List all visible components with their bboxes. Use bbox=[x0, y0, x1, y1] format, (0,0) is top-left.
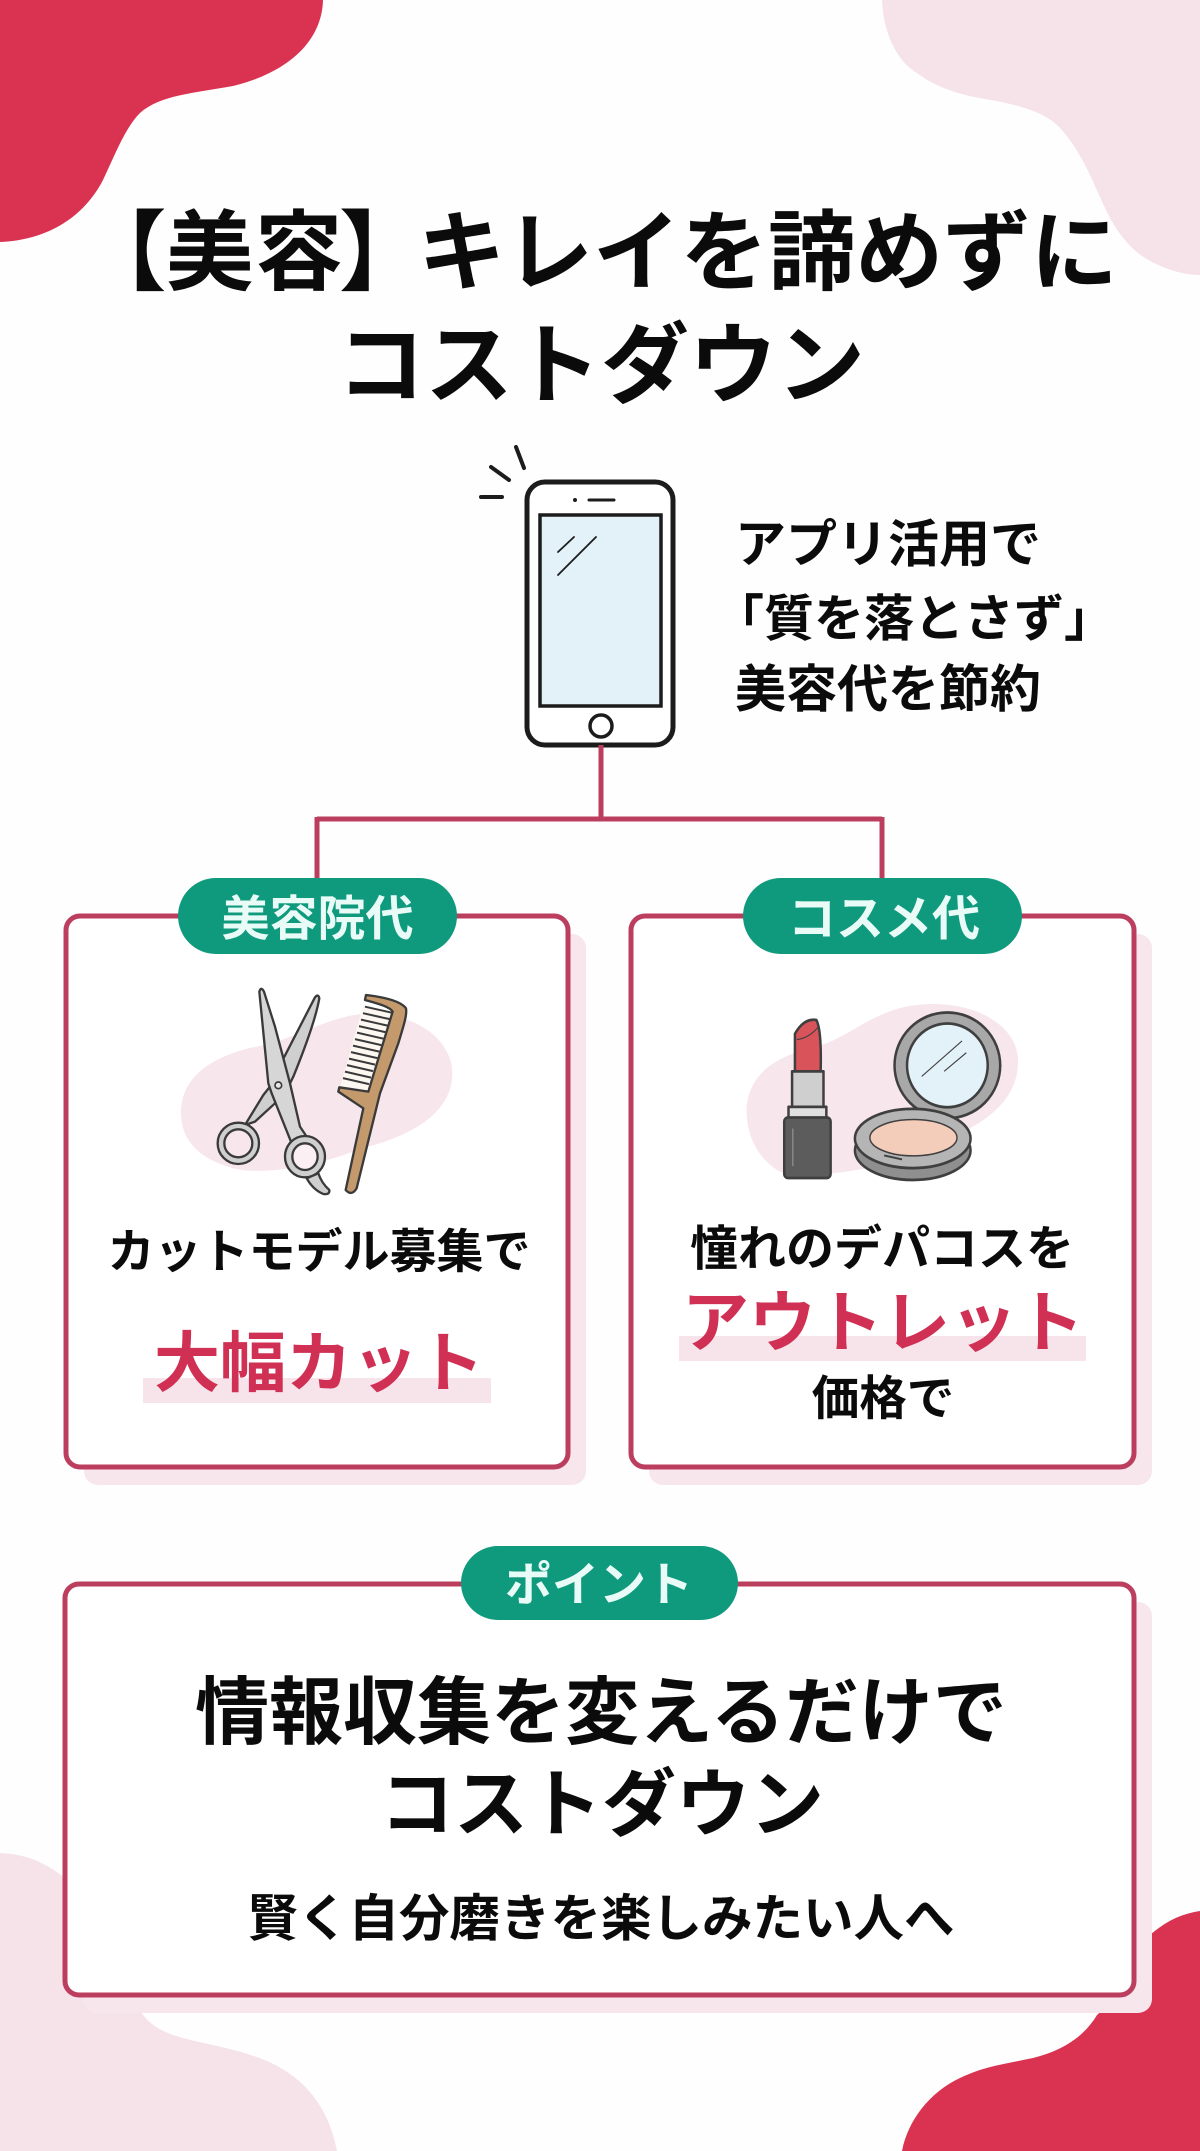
card frame bbox=[631, 916, 1134, 1467]
card text: salon: 大幅カット bbox=[154, 1326, 484, 1400]
title: コストダウン bbox=[337, 316, 865, 415]
icon: scissors and comb bbox=[181, 989, 452, 1194]
blob: top left crimson bbox=[0, 0, 323, 242]
pill: cosmetics: コスメ代 bbox=[788, 893, 980, 946]
tree connector bbox=[317, 745, 882, 885]
panel: cosmetics card bbox=[631, 878, 1152, 1485]
point heading: コストダウン bbox=[380, 1763, 824, 1846]
point subtext: 賢く自分磨きを楽しみたい人へ bbox=[248, 1890, 954, 1947]
card shadow bbox=[649, 934, 1152, 1485]
blob: bottom right crimson bbox=[902, 1911, 1200, 2151]
point heading bbox=[195, 1671, 1007, 1846]
pill: salon bbox=[178, 878, 457, 954]
pill: point: ポイント bbox=[505, 1558, 693, 1611]
card text: cosmetics: 憧れのデパコスを bbox=[690, 1223, 1074, 1276]
card text: cosmetics bbox=[679, 1223, 1086, 1426]
blob: top right pink bbox=[882, 0, 1200, 275]
intro text: 「質を落とさず」 bbox=[714, 591, 1114, 647]
icon: lipstick and compact bbox=[747, 1004, 1018, 1180]
pill: cosmetics bbox=[743, 878, 1022, 954]
panel: salon card bbox=[66, 878, 586, 1485]
intro text: 美容代を節約 bbox=[735, 661, 1041, 718]
icon: smartphone bbox=[481, 447, 673, 745]
card text: salon: カットモデル募集で bbox=[108, 1225, 530, 1278]
panel: point bbox=[65, 1546, 1152, 2013]
title bbox=[79, 204, 1118, 415]
point shadow bbox=[83, 1602, 1152, 2013]
card text: salon bbox=[108, 1225, 530, 1403]
intro text bbox=[714, 516, 1114, 718]
title: 【美容】キレイを諦めずに bbox=[79, 204, 1118, 302]
point frame bbox=[65, 1584, 1134, 1995]
intro text: アプリ活用で bbox=[735, 516, 1041, 573]
pill: salon: 美容院代 bbox=[221, 893, 414, 946]
point heading: 情報収集を変えるだけで bbox=[195, 1671, 1007, 1754]
card text: cosmetics: 価格で bbox=[812, 1373, 954, 1426]
pill: point bbox=[461, 1546, 738, 1620]
card shadow bbox=[84, 934, 586, 1485]
card text: cosmetics: アウトレット bbox=[682, 1286, 1084, 1361]
card frame bbox=[66, 916, 568, 1467]
blob: bottom left pink bbox=[0, 1853, 337, 2151]
